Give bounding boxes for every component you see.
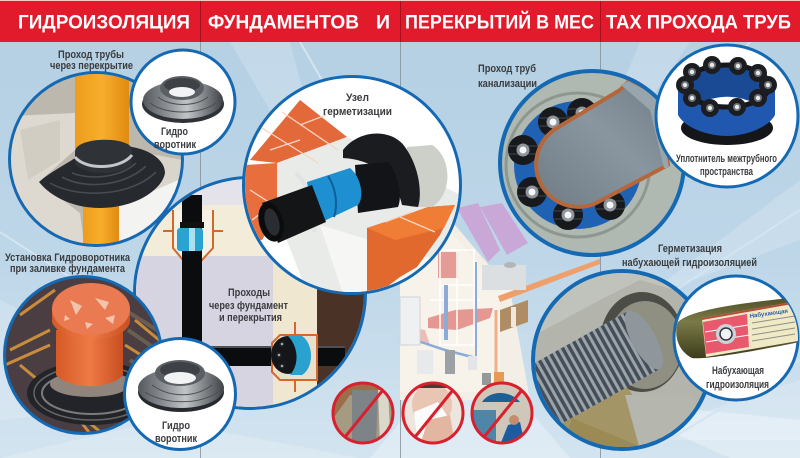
label: swelling (706, 365, 769, 391)
icon: seal ring (676, 56, 777, 145)
label: hydro collar: Гидро (162, 420, 190, 432)
panel: swelling product tube (674, 276, 800, 400)
caption: sealing node: герметизации (323, 106, 392, 118)
panel: collar product bottom (124, 338, 236, 450)
caption: pipe through slab: через перекрытие (50, 60, 133, 72)
label: swelling: гидроизоляция (706, 379, 769, 391)
caption: sewer pass: канализации (478, 78, 537, 90)
icon: no allergy (402, 382, 464, 445)
caption: swelling sealing: Герметизация (658, 243, 722, 255)
label: hydro collar (154, 126, 196, 151)
grey sleeve (407, 145, 447, 207)
black pipes (192, 195, 345, 356)
icon: no mold (332, 382, 395, 445)
caption: sewer pass (478, 63, 537, 90)
caption: sealing node (323, 92, 392, 118)
black pipe (262, 185, 326, 243)
black flange (343, 134, 420, 207)
yellow pipe (75, 70, 129, 155)
blue seal (307, 168, 361, 222)
caption: foundation install: Установка Гидроворотника (5, 252, 131, 264)
caption: passages: через фундамент (209, 300, 289, 312)
caption: sealing node: Узел (346, 92, 369, 104)
label: hydro collar: воротник (154, 139, 196, 151)
house illustration (400, 203, 600, 400)
panel: interpipe seal product (656, 45, 798, 187)
panel: pipe through slab photo (8, 71, 184, 247)
caption: passages (209, 287, 289, 324)
label: hydro collar (155, 420, 197, 445)
panel: swelling waterproof photo (531, 269, 706, 451)
panel: collar product top (131, 50, 235, 154)
label: hydro collar: воротник (155, 433, 197, 445)
title banner: ФУНДАМЕНТОВ (208, 12, 359, 34)
panel: passages through foundation (130, 175, 373, 416)
panel: sealing node (240, 75, 470, 300)
title banner: И (376, 12, 390, 34)
caption: pipe through slab: Проход трубы (58, 49, 124, 61)
label on tube: Набухающая (749, 308, 789, 320)
panel dividers (200, 42, 600, 458)
grey elbow with copper edge (536, 82, 668, 207)
title banner: ГИДРОИЗОЛЯЦИЯ (18, 12, 190, 34)
label: seal: пространства (700, 166, 754, 178)
caption: foundation install: при заливке фундамента (10, 263, 126, 275)
caption: passages: и перекрытия (219, 312, 282, 324)
caption: swelling sealing: набухающей гидроизоляцией (622, 257, 757, 269)
label: swelling: Набухающая (712, 365, 764, 377)
label: seal (676, 153, 777, 178)
dark body (355, 162, 400, 213)
panel: foundation pour photo (3, 275, 162, 435)
rubber collar (39, 140, 165, 208)
caption: passages: Проходы (228, 287, 270, 299)
title banner (0, 0, 800, 42)
label: hydro collar: Гидро (161, 126, 188, 138)
title banner: ТАХ ПРОХОДА ТРУБ (606, 12, 791, 34)
icon: no leaks (471, 382, 533, 445)
caption: foundation install (5, 252, 131, 275)
panel: sewer pipe passage (495, 65, 690, 260)
title banner: ПЕРЕКРЫТИЙ В МЕС (405, 10, 594, 34)
caption: swelling sealing (622, 243, 757, 269)
caption: pipe through slab (50, 49, 133, 72)
caption: sewer pass: Проход труб (478, 63, 536, 75)
